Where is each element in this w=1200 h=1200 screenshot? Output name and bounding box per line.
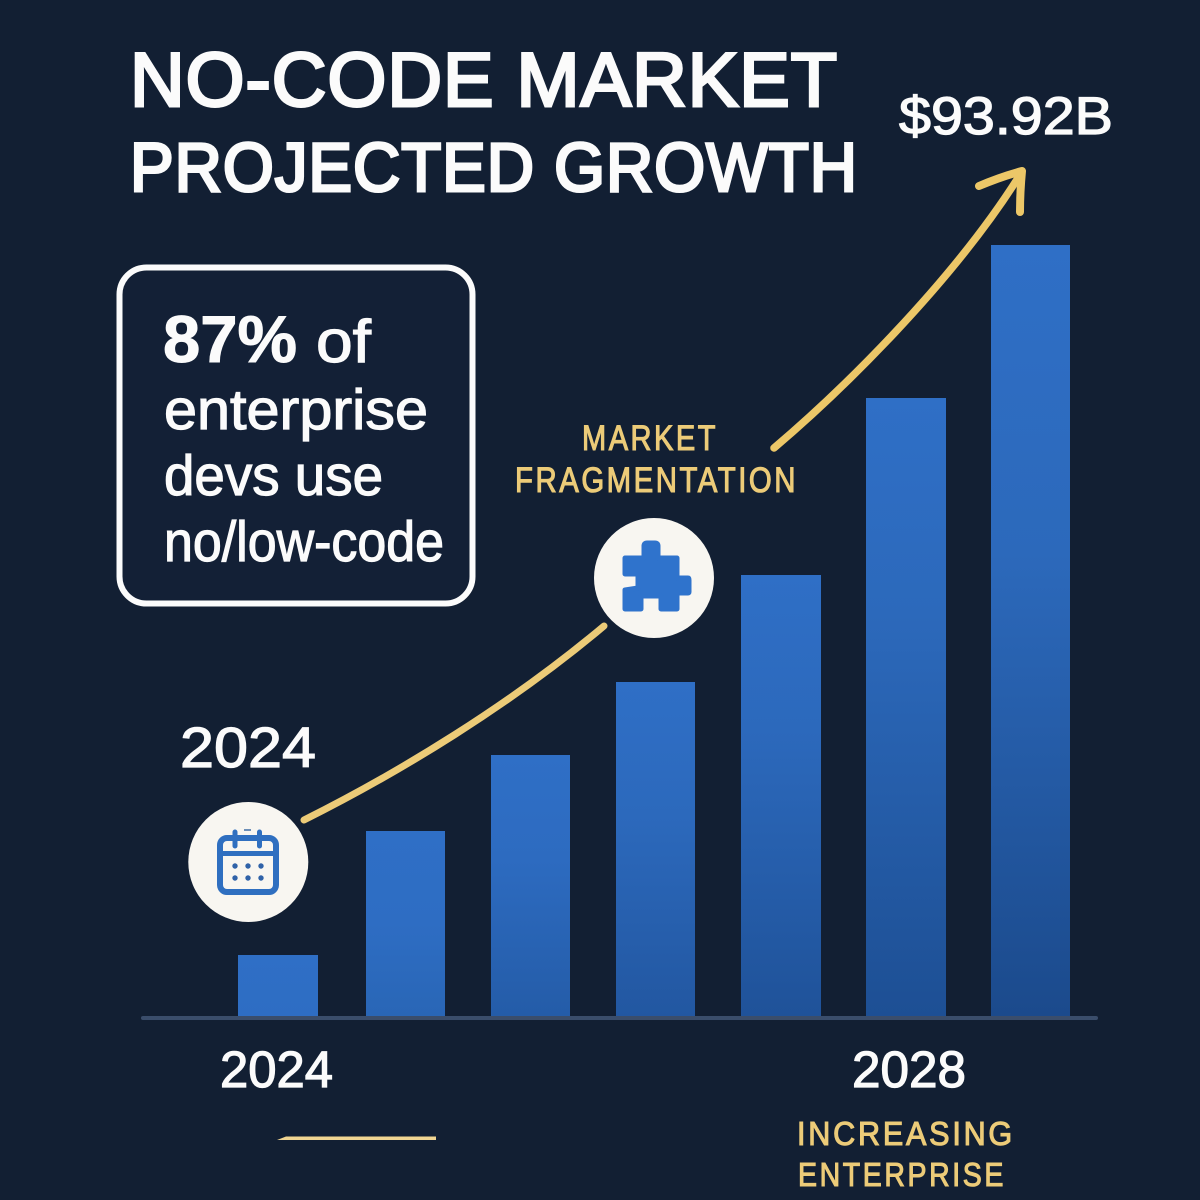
title line 2: PROJECTED GROWTH	[130, 129, 858, 206]
bar 4	[616, 682, 695, 1017]
label: market fragmentation	[515, 419, 798, 500]
bar 7	[991, 245, 1070, 1017]
icon: calendar	[188, 802, 308, 922]
calendar top mark	[244, 829, 251, 831]
callout text line 3: devs use	[164, 444, 383, 508]
bar 5	[741, 575, 821, 1017]
callout text line 2: enterprise	[164, 378, 428, 442]
chart baseline	[141, 1016, 1098, 1020]
callout border	[120, 268, 472, 604]
gold underline	[277, 1136, 436, 1140]
title	[130, 38, 858, 206]
callout text line 4: no/low-code	[164, 510, 444, 574]
puzzle badge	[594, 518, 714, 638]
start year label: 2024	[180, 716, 316, 780]
icon: puzzle piece	[594, 518, 714, 638]
calendar badge	[188, 802, 308, 922]
projected value label: $93.92B	[899, 87, 1113, 146]
arrow head	[979, 171, 1022, 212]
label line 1: INCREASING	[797, 1115, 1015, 1152]
label line 1: MARKET	[582, 419, 718, 458]
calendar body	[220, 838, 276, 892]
bar 6	[866, 398, 946, 1017]
calendar rings	[235, 832, 260, 846]
bar 3	[491, 755, 570, 1017]
axis label: 2024: 2024	[220, 1041, 333, 1098]
callout figure: 87%	[163, 302, 297, 376]
label line 2: FRAGMENTATION	[515, 461, 798, 500]
label line 2: ENTERPRISE	[798, 1156, 1006, 1193]
puzzle piece	[625, 543, 689, 609]
calendar dots	[232, 863, 264, 881]
axis label: 2028: 2028	[852, 1041, 966, 1098]
bar chart	[141, 245, 1098, 1020]
arrow: 2024 to market fragmentation	[304, 626, 604, 820]
callout text line 1: of	[316, 308, 371, 375]
bar 2	[366, 831, 445, 1017]
calendar header rule	[220, 851, 276, 856]
arrow shaft	[774, 178, 1018, 448]
arrow: market fragmentation to $93.92B	[774, 171, 1022, 448]
title line 1: NO-CODE MARKET	[130, 38, 838, 123]
bar 1	[238, 955, 318, 1017]
callout: 87% of enterprise devs	[120, 268, 472, 604]
label: increasing enterprise	[797, 1115, 1015, 1193]
